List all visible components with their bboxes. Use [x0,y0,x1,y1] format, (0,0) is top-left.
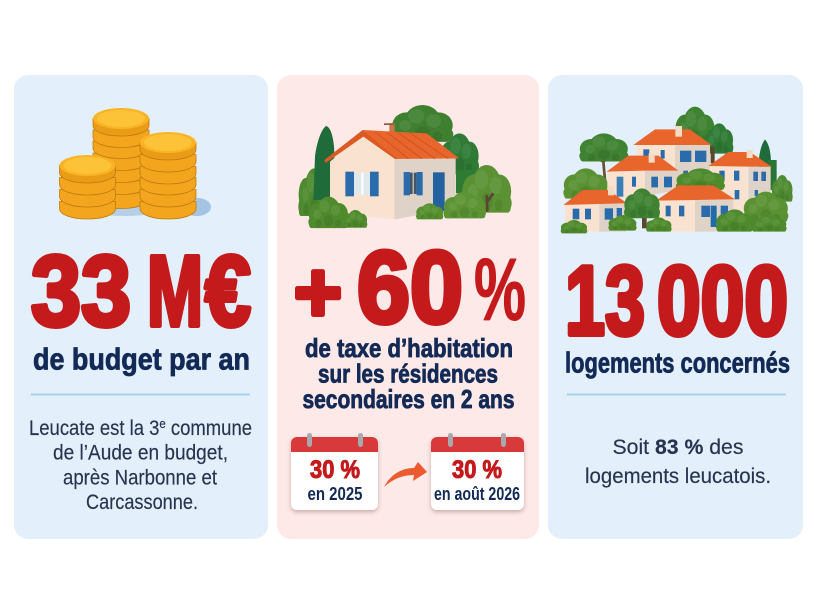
text block: budget explanation: après Narbonne et [63,466,217,490]
calendar: août 2026: en août 2026 [434,484,520,504]
text block: budget explanation: Carcassonne. [86,491,198,514]
big number: 33 M€: M [147,236,203,348]
text block: budget explanation: commune [166,417,252,440]
calendar: 2025: 30 % [310,456,360,484]
big number: 33 M€: 33 [31,236,131,348]
big number: 33 M€ [31,236,251,348]
text block: budget explanation: e [159,416,166,431]
icon: village of houses [561,107,793,233]
subheading: taxe d'habitation: sur les résidences [318,358,498,388]
arrow [384,462,427,487]
panel: taxe d'habitation [277,75,539,539]
big number: 33 M€: € [205,236,251,348]
icon: coin stacks [60,108,211,219]
panel: budget [14,75,268,539]
calendar: août 2026 [431,433,524,510]
big number: 13 000 [565,246,788,356]
big number: +60 % [294,230,526,344]
panel: logements [548,75,803,539]
subheading: de budget par an: de budget par an [33,342,250,376]
text block: budget explanation: Leucate est la 3 [29,417,177,440]
calendar: août 2026: 30 % [452,456,502,484]
subheading: taxe d'habitation: secondaires en 2 ans [302,384,514,414]
text block: logements explanation: Soit 83 % des [612,436,743,459]
text block: budget explanation [29,416,252,514]
subheading: taxe d'habitation [302,333,514,414]
icon: house with trees [298,105,512,228]
text block: logements explanation: logements leucatois. [585,465,771,488]
big number: 13 000: 000 [657,246,788,356]
calendar: 2025 [291,433,378,510]
big number: +60 %: + [294,245,342,339]
big number: +60 %: % [474,240,526,339]
calendar: 2025: en 2025 [308,484,362,504]
subheading: taxe d'habitation: de taxe d’habitation [305,333,513,363]
text block: budget explanation: de l’Aude en budget, [53,442,228,464]
text block: logements explanation [585,436,771,488]
big number: +60 %: 60 [357,230,463,344]
big number: 13 000: 13 [565,246,645,356]
